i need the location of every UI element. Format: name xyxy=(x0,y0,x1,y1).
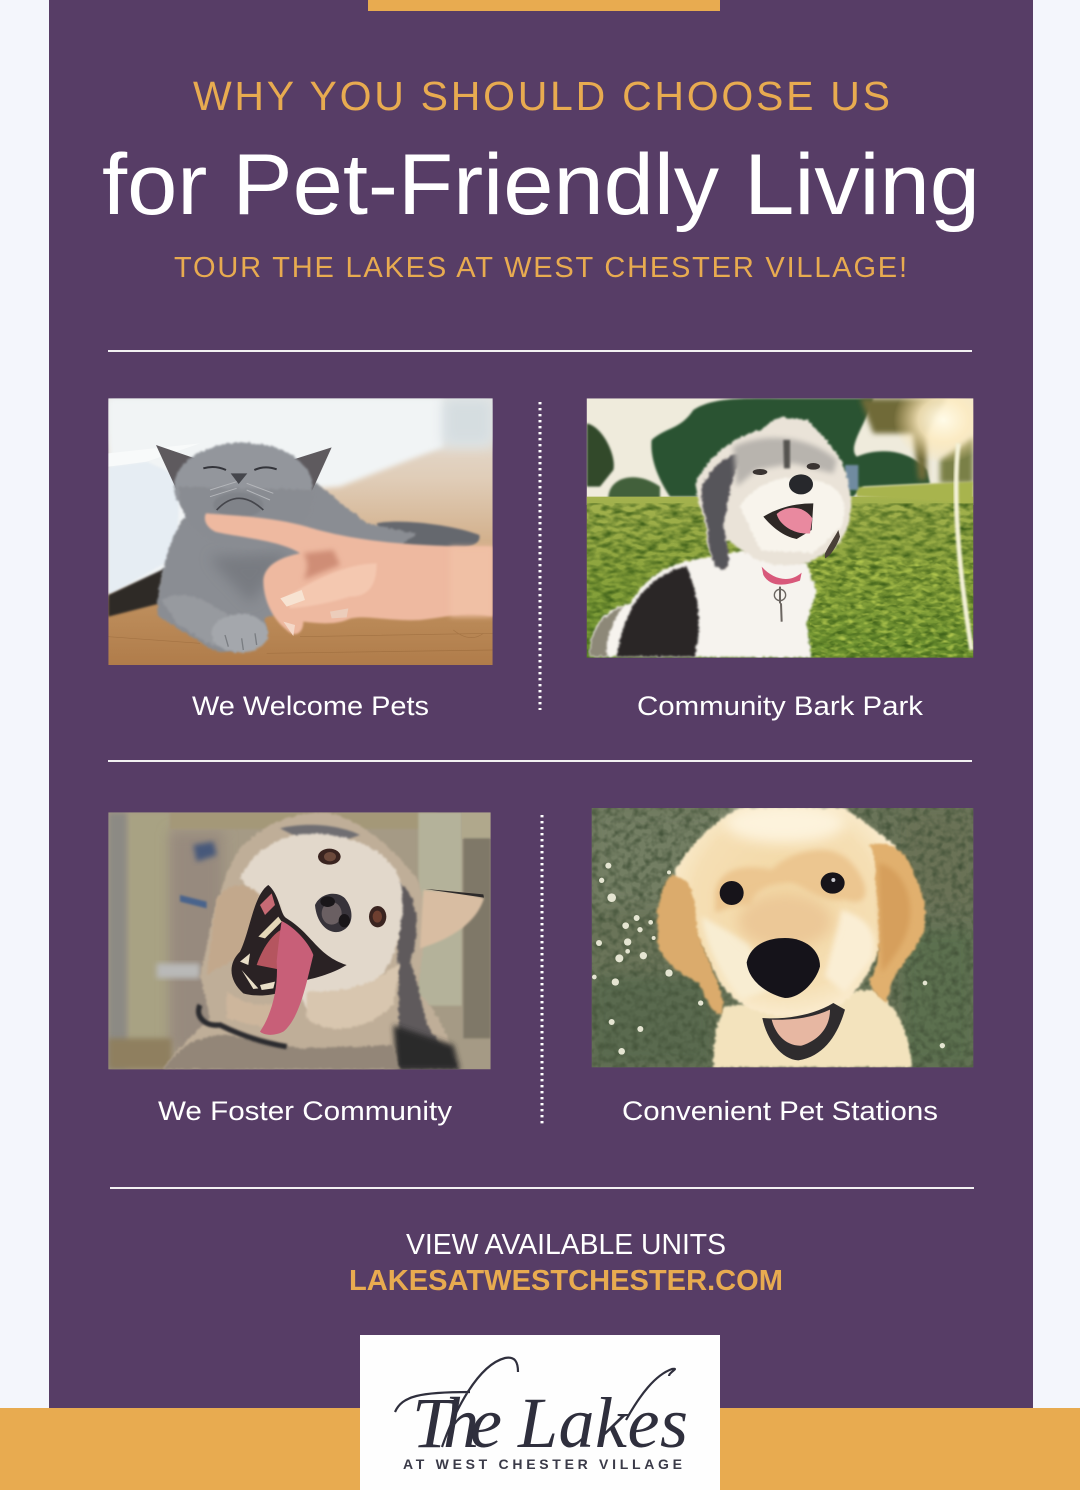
logo: The Lakes at West Chester Village xyxy=(360,1335,720,1490)
logo: The Lakes at West Chester Village: AT WEST CHESTER VILLAGE xyxy=(403,1456,682,1472)
cat ears xyxy=(156,445,195,490)
subheading: TOUR THE LAKES AT WEST CHESTER VILLAGE! xyxy=(174,252,907,284)
collar xyxy=(762,567,802,585)
husky tongue xyxy=(260,921,313,1035)
logo: The Lakes at West Chester Village: The xyxy=(412,1383,502,1463)
puppy head xyxy=(675,808,897,1016)
cat head xyxy=(172,440,314,508)
hand xyxy=(205,513,493,634)
photo: grey cat being petted xyxy=(108,398,493,665)
dog head xyxy=(696,417,851,570)
caption: We Welcome Pets: We Welcome Pets xyxy=(192,691,429,721)
clover flowers xyxy=(592,863,945,1055)
caption: Community Bark Park: Community Bark Park xyxy=(637,691,924,721)
bottom accent band xyxy=(0,1408,1080,1490)
logo: The Lakes at West Chester Village: Lakes xyxy=(517,1383,688,1463)
husky nose xyxy=(315,894,351,932)
husky fur body xyxy=(163,812,460,1069)
puppy mouth xyxy=(762,1003,845,1060)
puppy chest xyxy=(713,990,912,1067)
photo: golden retriever puppy xyxy=(592,803,973,1067)
puppy ears xyxy=(657,875,723,1014)
puppy nose xyxy=(747,938,820,998)
husky face xyxy=(240,833,403,1009)
top accent bar xyxy=(368,0,720,11)
dotted dividers xyxy=(540,402,542,1125)
call to action text: VIEW AVAILABLE UNITS xyxy=(406,1229,726,1261)
photo: husky with tongue out xyxy=(108,812,491,1069)
caption: We Foster Community: We Foster Community xyxy=(158,1096,453,1126)
website link: LAKESATWESTCHESTER.COM xyxy=(349,1265,783,1297)
caption: Convenient Pet Stations: Convenient Pet Stations xyxy=(622,1096,938,1126)
dog body xyxy=(590,550,817,658)
main title: for Pet-Friendly Living xyxy=(102,137,980,233)
husky mouth xyxy=(232,885,347,996)
cat tail and body xyxy=(377,522,480,551)
husky ear xyxy=(420,890,484,948)
photo: small dog in park xyxy=(586,398,974,658)
husky collar xyxy=(199,1005,287,1047)
puppy eyes xyxy=(720,881,744,905)
eyebrow heading: WHY YOU SHOULD CHOOSE US xyxy=(193,73,890,119)
divider lines xyxy=(108,351,974,1188)
